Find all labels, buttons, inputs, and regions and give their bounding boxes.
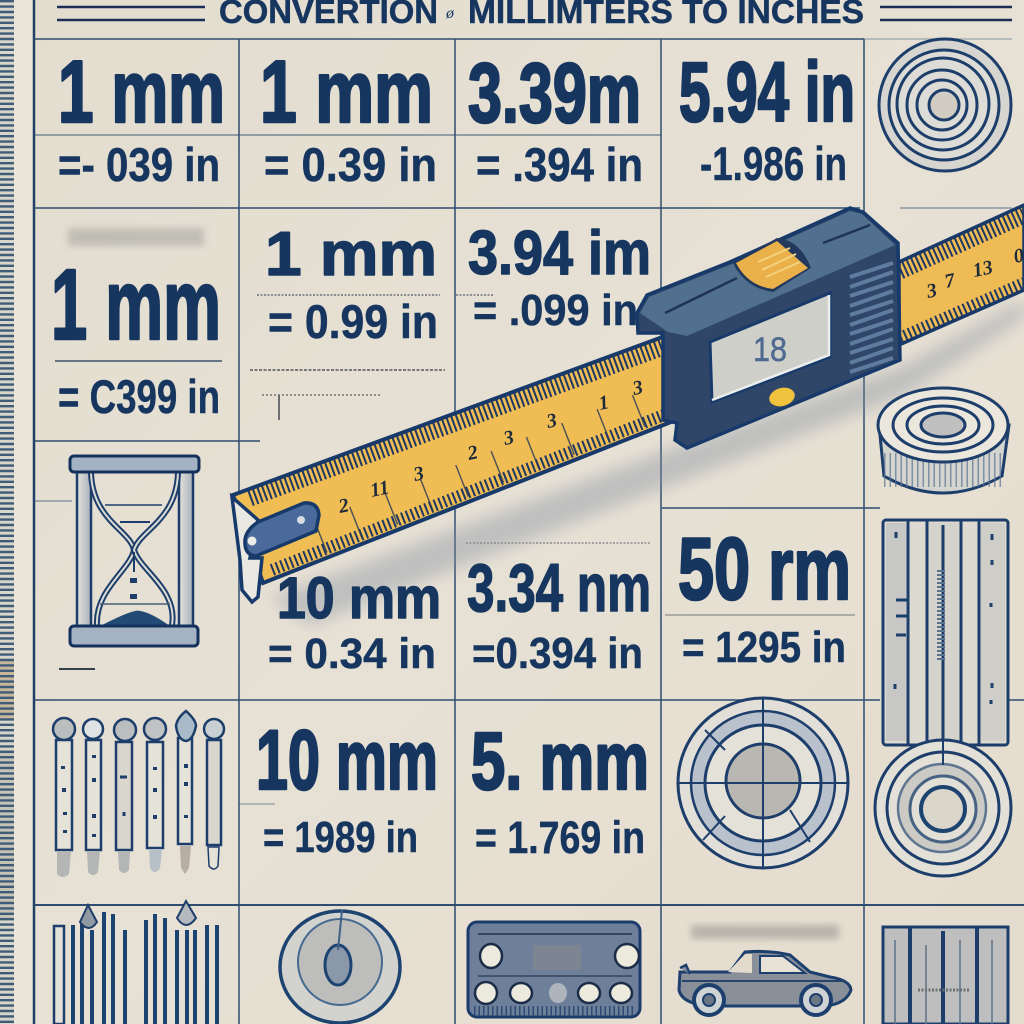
icon: control panel — [468, 922, 640, 1017]
icon: concentric rings — [879, 39, 1011, 171]
right tape blade: 13 — [971, 256, 995, 282]
conversion row 4: 10 mm — [256, 713, 438, 807]
left tape blade: 3 — [544, 409, 559, 433]
left tape blade: 11 — [368, 476, 391, 502]
icon: vertical ruler panel — [883, 520, 1008, 745]
icon: row of pins — [53, 711, 224, 877]
icon: grooved block — [883, 927, 1008, 1024]
conversion row 3: 3.34 nm — [467, 550, 651, 626]
icon: hourglass — [59, 456, 199, 669]
tape measure — [232, 205, 1024, 602]
pin 5 — [176, 711, 196, 874]
pin 2 — [83, 719, 103, 875]
conversion row 2: 3.94 im — [468, 219, 651, 288]
display screen — [710, 293, 830, 402]
title text — [219, 0, 864, 30]
top face — [640, 211, 895, 336]
right tape blade: 7 — [943, 269, 958, 293]
conversion row 1: = .394 in — [476, 138, 643, 191]
conversion row 2: 1 mm — [51, 249, 221, 361]
conversion row 4 — [256, 713, 649, 863]
tape hook — [232, 497, 319, 602]
left tape blade: 2 — [336, 494, 351, 518]
conversion row 3: 50 rm — [678, 519, 851, 618]
conversion row 1: 3.39m — [468, 46, 641, 140]
icon: dial disc — [280, 910, 400, 1023]
title text: ø — [445, 5, 455, 22]
tape shadow — [270, 300, 1024, 625]
conversion row 1: 5.94 in — [679, 45, 855, 139]
panel display — [533, 945, 581, 970]
left tape blade: 2 — [465, 441, 480, 465]
conversion row 2 — [51, 219, 651, 423]
conversion row 1: 1 mm — [260, 42, 433, 141]
icon: target disc — [678, 698, 848, 868]
conversion row 2: = C399 in — [58, 370, 220, 423]
smudged label — [691, 925, 839, 939]
conversion row 1 — [58, 42, 855, 191]
title rule left — [57, 7, 205, 20]
left tape blade — [233, 332, 676, 583]
conversion row 3: 10 mm — [277, 566, 441, 631]
conversion row 3 — [268, 519, 855, 678]
left tape blade: 3 — [501, 426, 516, 450]
conversion row 4: 5. mm — [471, 716, 649, 807]
conversion row 1: 1 mm — [58, 42, 225, 141]
conversion row 1: =- 039 in — [58, 138, 220, 191]
right tape blade: 3 — [924, 279, 939, 303]
icon: concentric circle — [875, 740, 1011, 876]
icon: tape roll — [878, 388, 1009, 493]
car wheels — [694, 985, 831, 1015]
pin 3 — [114, 719, 136, 873]
conversion row 1: -1.986 in — [700, 137, 847, 190]
tape body — [637, 208, 900, 448]
conversion row 3: = 0.34 in — [268, 630, 436, 678]
conversion row 3: = 1295 in — [682, 623, 846, 672]
yellow slider — [733, 238, 811, 292]
display screen: 18 — [753, 331, 787, 369]
left tape blade: 1 — [597, 391, 611, 415]
conversion row 2: = .099 in — [473, 286, 638, 335]
pin 4 — [144, 718, 166, 872]
conversion row 2: = 0.99 in — [268, 295, 438, 348]
right tape blade — [899, 205, 1024, 345]
left tape blade: 3 — [411, 462, 426, 486]
title rule right — [880, 7, 1012, 20]
panel buttons — [475, 944, 639, 1004]
conversion row 1: = 0.39 in — [264, 138, 437, 191]
conversion row 4: = 1.769 in — [475, 812, 645, 863]
grip vents — [850, 263, 893, 372]
yellow button — [767, 385, 797, 409]
pin 6 — [204, 719, 224, 869]
conversion row 4: = 1989 in — [263, 813, 418, 862]
title — [57, 0, 1012, 30]
icon: bars with pins — [54, 901, 217, 1024]
pin 1 — [53, 718, 75, 877]
conversion row 2: 1 mm — [265, 220, 437, 289]
blurred note — [68, 228, 204, 246]
icon: car — [679, 925, 851, 1015]
left tape blade: 3 — [630, 376, 645, 400]
left ruler strip — [0, 0, 34, 1024]
conversion row 3: =0.394 in — [472, 629, 643, 678]
